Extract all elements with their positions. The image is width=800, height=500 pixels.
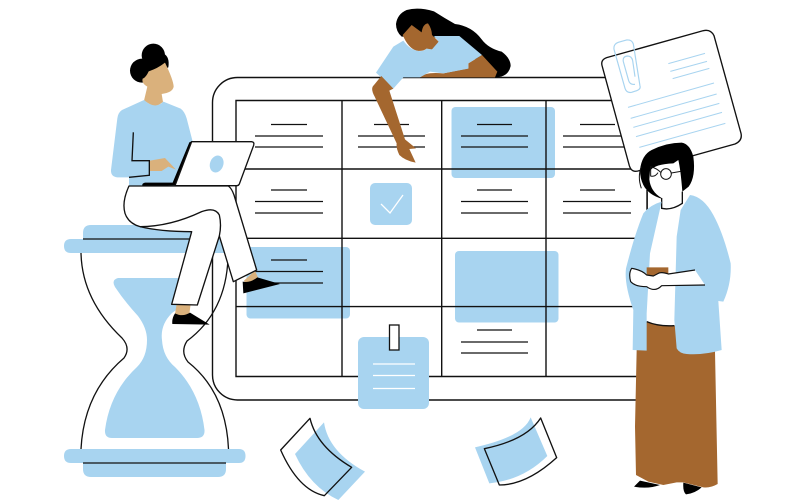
glass outline — [81, 253, 228, 449]
paperclip — [614, 40, 640, 92]
blue highlighted cell right — [455, 251, 558, 322]
sand — [105, 278, 205, 438]
far arm — [420, 55, 497, 77]
trousers — [124, 186, 257, 305]
schedule text lines — [255, 124, 631, 353]
white top — [647, 202, 681, 326]
pinned note — [358, 325, 429, 409]
board outline and grid — [212, 78, 647, 400]
glasses — [651, 167, 681, 179]
long hair — [396, 9, 511, 77]
icon: check tile — [370, 183, 412, 225]
near arm — [372, 76, 416, 163]
blue highlighted cell left — [246, 247, 350, 318]
calendar board — [212, 78, 647, 409]
top cap — [64, 225, 240, 253]
laptop — [142, 142, 254, 186]
loose papers — [281, 417, 557, 500]
feet — [175, 271, 258, 316]
skirt — [634, 322, 718, 494]
face and neck — [142, 63, 174, 107]
hand — [150, 158, 176, 171]
hourglass — [64, 225, 246, 477]
document lines — [628, 53, 725, 147]
woman with glasses — [626, 143, 731, 494]
right paper — [475, 417, 547, 483]
hair bun — [130, 44, 169, 83]
left paper — [295, 422, 365, 500]
bottom cap — [64, 449, 246, 477]
person leaning over board — [372, 9, 511, 163]
card held — [647, 267, 668, 276]
shoes — [634, 481, 702, 494]
shirt — [376, 36, 482, 89]
shirt — [111, 100, 193, 186]
floating document — [602, 30, 741, 171]
face — [403, 23, 439, 51]
hands — [630, 268, 705, 289]
cardigan right — [674, 195, 731, 354]
cardigan left — [626, 202, 662, 351]
hair — [640, 143, 694, 199]
face — [649, 160, 682, 209]
person with laptop — [111, 44, 280, 325]
shoes — [172, 277, 280, 325]
blue highlighted cell top — [452, 107, 555, 178]
